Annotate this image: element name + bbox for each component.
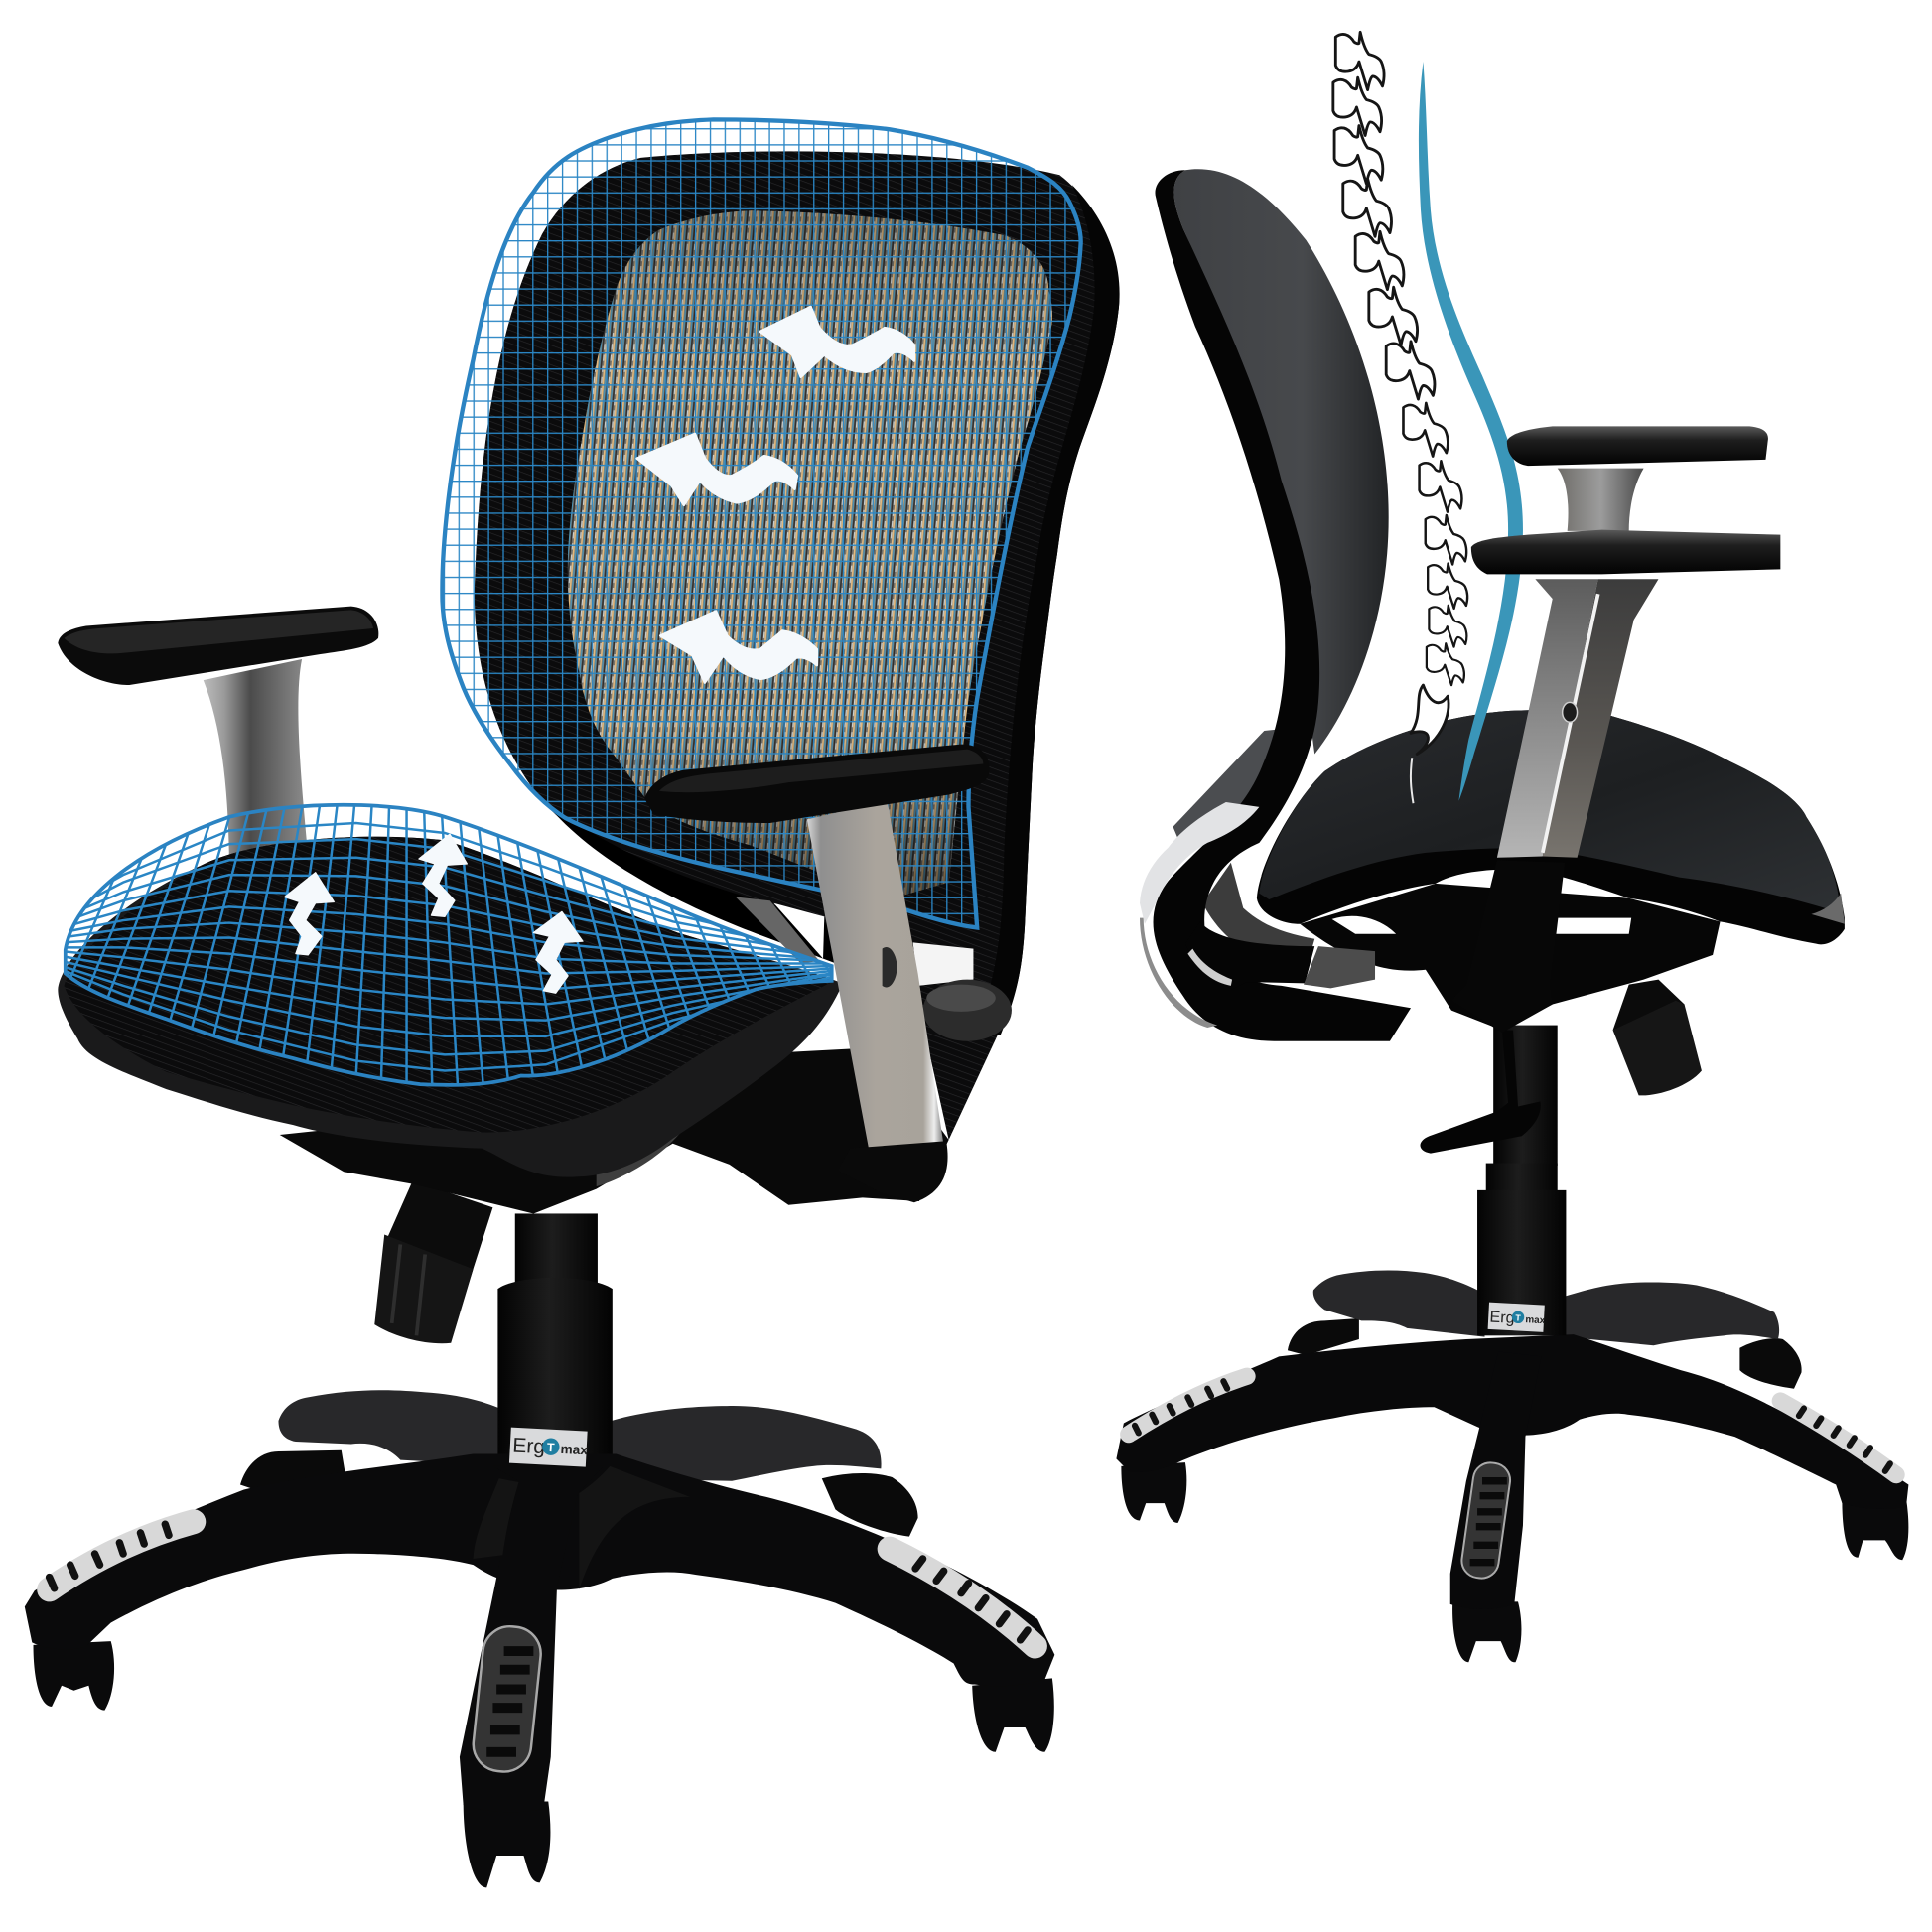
gas lift column — [1477, 1026, 1566, 1335]
mesh seat — [58, 837, 843, 1177]
spine vertebrae illustration — [1333, 32, 1467, 803]
Ergomax column label: Erg — [512, 1435, 546, 1458]
back mesh lower panel — [1173, 727, 1300, 850]
near armrest — [644, 745, 990, 1202]
back mesh panel — [1173, 169, 1389, 755]
side base legs — [1116, 1334, 1908, 1609]
recline knob — [374, 1180, 492, 1343]
icon: airflow arrows through backrest — [637, 307, 914, 683]
grey outer frame edge — [1140, 918, 1217, 1028]
height adjustment lever — [1420, 1031, 1541, 1154]
foot strips — [1129, 1376, 1896, 1581]
Ergomax column label — [509, 1428, 589, 1467]
Ergomax column label: T — [1515, 1312, 1522, 1323]
rear casters and rear base legs — [240, 1390, 918, 1537]
left chair: angled front view — [0, 119, 1120, 1887]
base legs — [25, 1453, 1054, 1686]
backrest mesh panel — [568, 210, 1052, 899]
backrest blue ventilation grid — [442, 119, 1081, 928]
seat mechanism — [1300, 884, 1721, 1031]
frame lower strut — [1185, 921, 1314, 990]
recline knob — [1613, 980, 1702, 1095]
blue spine curve — [1419, 62, 1523, 801]
frame lower gap — [1187, 949, 1232, 986]
icon: airflow arrows through seat — [285, 834, 583, 993]
five-star base — [25, 1453, 1054, 1887]
far armrest — [58, 607, 378, 857]
Ergomax column label: Erg — [1489, 1309, 1515, 1327]
caster wheels — [34, 1641, 1054, 1887]
back frame — [1154, 170, 1411, 1041]
backrest frame — [475, 151, 1119, 1140]
Ergomax column label: max — [560, 1442, 589, 1457]
Ergomax column label: T — [547, 1441, 555, 1454]
under-frame grey mesh — [1202, 863, 1314, 973]
Ergomax column label: max — [1525, 1314, 1546, 1326]
casters — [1121, 1462, 1908, 1662]
gas lift column — [497, 1213, 613, 1468]
rear casters and rear base legs — [1288, 1270, 1802, 1389]
foot strips — [50, 1522, 1035, 1774]
seat blue ventilation grid — [64, 802, 834, 1087]
under-seat mechanism — [280, 897, 1012, 1213]
Ergomax column label — [1488, 1303, 1547, 1332]
white frame band — [1140, 802, 1259, 924]
right chair: side view — [1116, 32, 1908, 1662]
side armrests — [1451, 426, 1780, 1033]
mesh seat side — [1257, 710, 1845, 944]
